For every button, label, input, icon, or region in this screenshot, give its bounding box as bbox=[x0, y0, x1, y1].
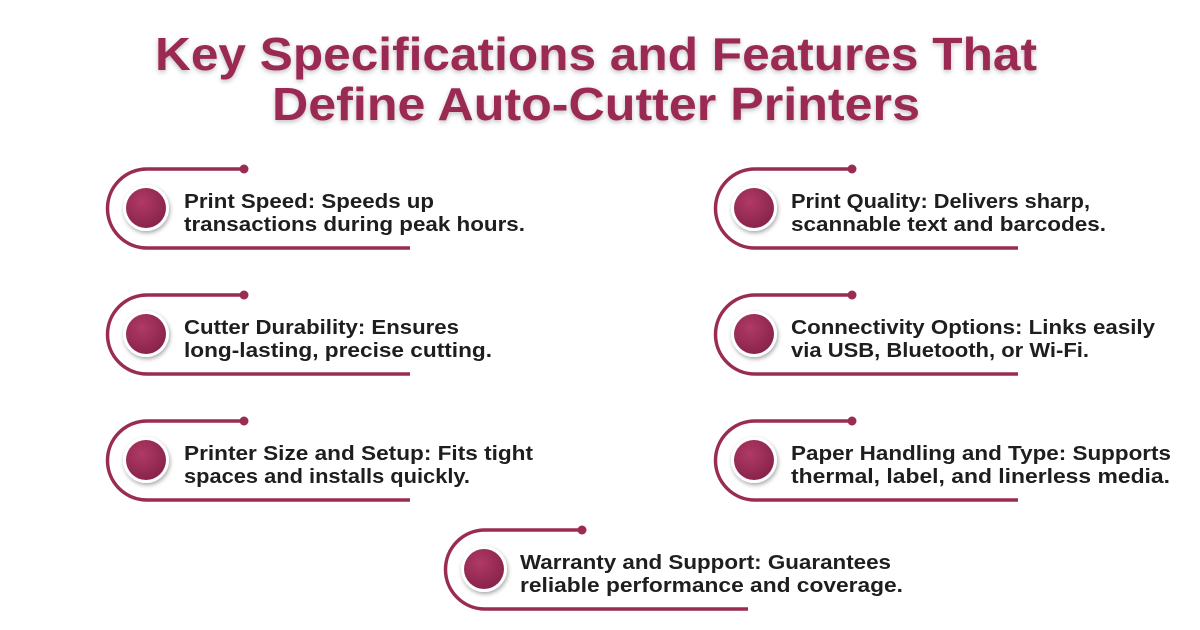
item: paper handling: Paper Handling and Type: Supports bbox=[791, 443, 1171, 465]
item: warranty: Warranty and Support: Guarantees bbox=[520, 552, 891, 574]
item: warranty: reliable performance and coverage. bbox=[520, 575, 903, 597]
item: cutter durability: Cutter Durability: Ensures bbox=[184, 317, 459, 339]
item: printer size: spaces and installs quickly. bbox=[184, 466, 470, 488]
item: print speed: transactions during peak hours. bbox=[184, 214, 525, 236]
item: printer size bbox=[108, 416, 533, 500]
item: connectivity: Connectivity Options: Links easily bbox=[791, 317, 1156, 339]
item: printer size: Printer Size and Setup: Fits tight bbox=[184, 443, 533, 465]
item: connectivity bbox=[716, 290, 1156, 374]
item: warranty bbox=[446, 526, 903, 609]
item: print speed bbox=[108, 164, 525, 248]
item: print quality bbox=[716, 164, 1106, 248]
item: paper handling bbox=[716, 416, 1171, 500]
item: print speed: Print Speed: Speeds up bbox=[184, 191, 434, 213]
item: paper handling: thermal, label, and linerless media. bbox=[791, 466, 1170, 488]
item: print quality: Print Quality: Delivers sharp, bbox=[791, 191, 1090, 213]
title bbox=[155, 28, 1037, 130]
title: Define Auto-Cutter Printers bbox=[272, 78, 920, 130]
item: connectivity: via USB, Bluetooth, or Wi-Fi. bbox=[791, 340, 1089, 362]
item: print quality: scannable text and barcodes. bbox=[791, 214, 1106, 236]
item: cutter durability: long-lasting, precise cutting. bbox=[184, 340, 492, 362]
item: cutter durability bbox=[108, 290, 492, 374]
title: Key Specifications and Features That bbox=[155, 28, 1037, 80]
